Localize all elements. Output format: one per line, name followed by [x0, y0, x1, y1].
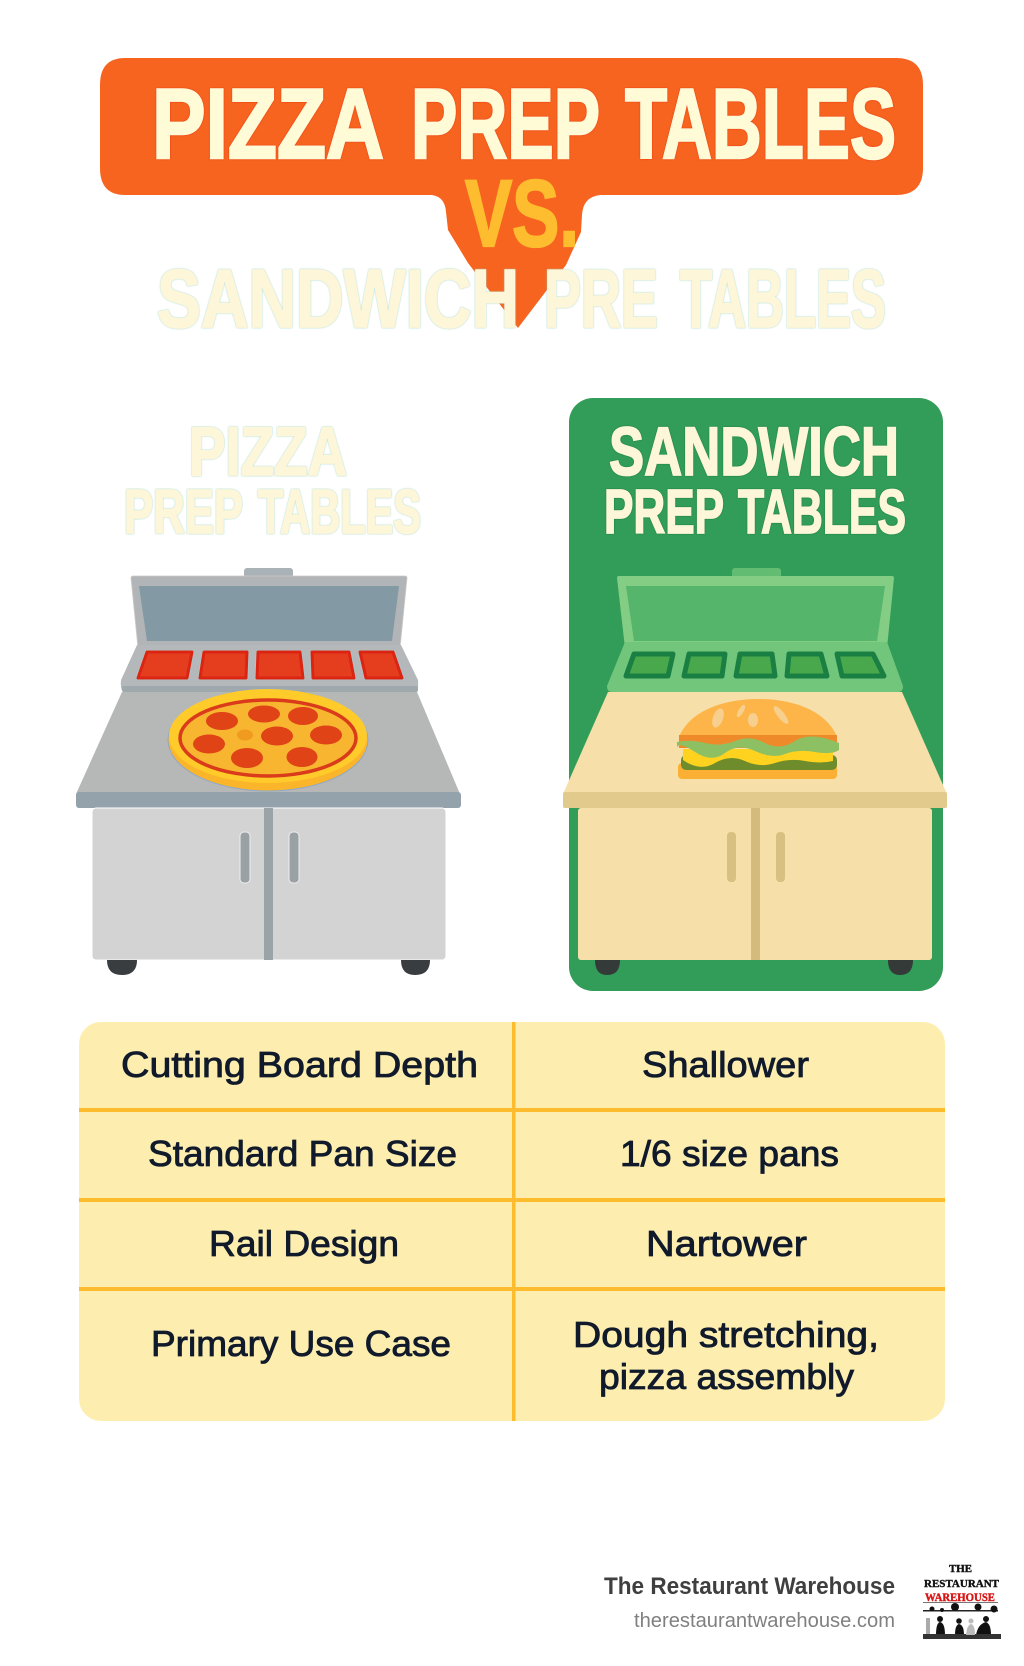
comparison table: [79, 1022, 945, 1421]
panel: sandwich prep table: [563, 398, 947, 991]
heading: sandwich pre tables: SANDWICH: [157, 252, 519, 345]
pan rail: [607, 642, 903, 692]
panel heading: sandwich prep tables: SANDWICH: [609, 413, 899, 490]
speech bubble shape: [100, 58, 923, 328]
row: rail design: Nartower: [646, 1223, 807, 1264]
cabinet: [92, 808, 446, 960]
wheels: [107, 960, 137, 975]
table grid lines: [79, 1022, 945, 1421]
lid handle: [244, 568, 293, 580]
row: primary use case: Primary Use Case: [151, 1323, 451, 1364]
wheels: [595, 960, 620, 975]
door handles: [727, 832, 736, 882]
heading: pizza prep tables: TABLES: [625, 68, 896, 179]
heading: pizza prep tables: PIZZA: [152, 68, 384, 179]
panel heading: pizza prep tables: PIZZA: [189, 413, 347, 490]
row: primary use case: Dough stretching,: [573, 1314, 879, 1355]
countertop: [563, 692, 947, 794]
panel heading: pizza prep tables: [124, 413, 421, 547]
row: primary use case: [151, 1314, 879, 1397]
lid glass: [139, 586, 399, 641]
countertop: [76, 692, 460, 794]
panel heading: sandwich prep tables: [604, 413, 906, 547]
row: standard pan size: Standard Pan Size: [148, 1133, 457, 1174]
row: cutting board depth: [121, 1044, 809, 1085]
row: rail design: [209, 1223, 807, 1264]
row: standard pan size: [148, 1133, 839, 1174]
heading: pizza prep tables: PREP: [411, 68, 600, 179]
door handles: [240, 832, 250, 883]
panel heading: sandwich prep tables: TABLES: [738, 478, 906, 547]
ingredient pans: [626, 654, 884, 676]
ingredient pans: [138, 652, 402, 678]
counter front lip: [563, 792, 947, 808]
open lid: [617, 576, 894, 648]
heading: sandwich pre tables: [157, 252, 886, 345]
green panel background: [569, 398, 943, 991]
lid handle: [732, 568, 781, 580]
heading: vs: VS.: [465, 161, 579, 267]
logo: RESTAURANT: [924, 1578, 1000, 1590]
logo: THE: [949, 1563, 972, 1575]
cabinet divider: [751, 808, 760, 960]
footer brand: [604, 1563, 1001, 1639]
heading: sandwich pre tables: PRE: [544, 252, 658, 345]
cabinet divider: [264, 808, 273, 960]
open lid: [131, 576, 407, 648]
illustration: sandwich prep table: [563, 568, 947, 975]
pan rail: [121, 645, 418, 692]
cabinet: [578, 808, 932, 960]
row: rail design: Rail Design: [209, 1223, 399, 1264]
row: standard pan size: 1/6 size pans: [620, 1133, 839, 1174]
heading: sandwich pre tables: TABLES: [680, 252, 886, 345]
table background: [79, 1022, 945, 1421]
icon: sandwich: [677, 699, 839, 779]
brand url: therestaurantwarehouse.com: [634, 1610, 895, 1632]
panel heading: pizza prep tables: TABLES: [258, 478, 421, 547]
logo: WAREHOUSE: [925, 1592, 995, 1604]
illustration: pizza prep table: [76, 568, 461, 975]
brand name: The Restaurant Warehouse: [604, 1573, 895, 1600]
panel heading: sandwich prep tables: PREP: [604, 478, 724, 547]
icon: pizza: [168, 689, 368, 791]
lid glass: [626, 586, 885, 641]
panel heading: pizza prep tables: PREP: [124, 478, 243, 547]
panel: pizza prep table: [76, 413, 461, 975]
heading: pizza prep tables: [152, 68, 896, 179]
row: cutting board depth: Shallower: [642, 1044, 809, 1085]
counter front lip: [76, 792, 461, 808]
row: cutting board depth: Cutting Board Depth: [121, 1044, 478, 1085]
title banner: [100, 58, 923, 345]
logo: [923, 1563, 1001, 1639]
row: primary use case: pizza assembly: [599, 1356, 854, 1397]
